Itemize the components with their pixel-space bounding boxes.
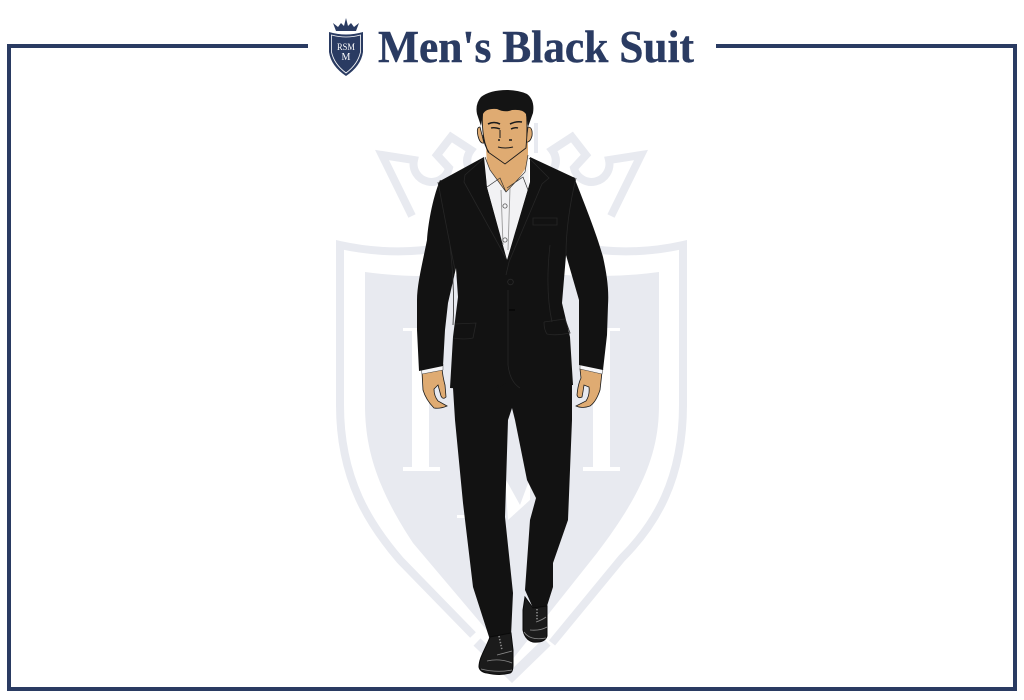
right cuff — [580, 363, 603, 374]
facial features — [483, 122, 522, 152]
watermark: inner shield — [365, 268, 659, 660]
jacket body — [440, 157, 575, 390]
jacket button — [508, 279, 513, 285]
figure: man in black suit — [417, 90, 608, 674]
watermark: crown centre post — [534, 123, 538, 153]
title: Men's Black Suit — [378, 21, 695, 72]
logo: crest with crown — [329, 18, 363, 76]
logo: crest with crown: RSM — [337, 43, 355, 53]
jacket seams and pockets — [438, 158, 576, 388]
left hand — [422, 369, 447, 408]
right ear — [526, 127, 532, 142]
right hand — [576, 369, 602, 408]
left shoe — [479, 633, 513, 674]
face — [482, 106, 527, 164]
hair — [476, 90, 533, 127]
left cuff — [421, 364, 443, 374]
left ear — [477, 127, 484, 143]
shirt — [485, 155, 529, 258]
logo: crest with crown: M — [342, 52, 351, 63]
trousers — [452, 372, 572, 640]
watermark: shield outline — [340, 232, 683, 676]
right sleeve — [552, 177, 608, 370]
watermark: crown right — [549, 137, 641, 216]
watermark: crown left — [382, 137, 474, 216]
left sleeve — [417, 180, 470, 371]
watermark shield and crown — [340, 123, 683, 676]
right shoe — [523, 597, 547, 642]
neck — [485, 130, 528, 195]
watermark: white monogram strokes — [403, 328, 620, 520]
jacket buttonhole — [509, 309, 515, 311]
